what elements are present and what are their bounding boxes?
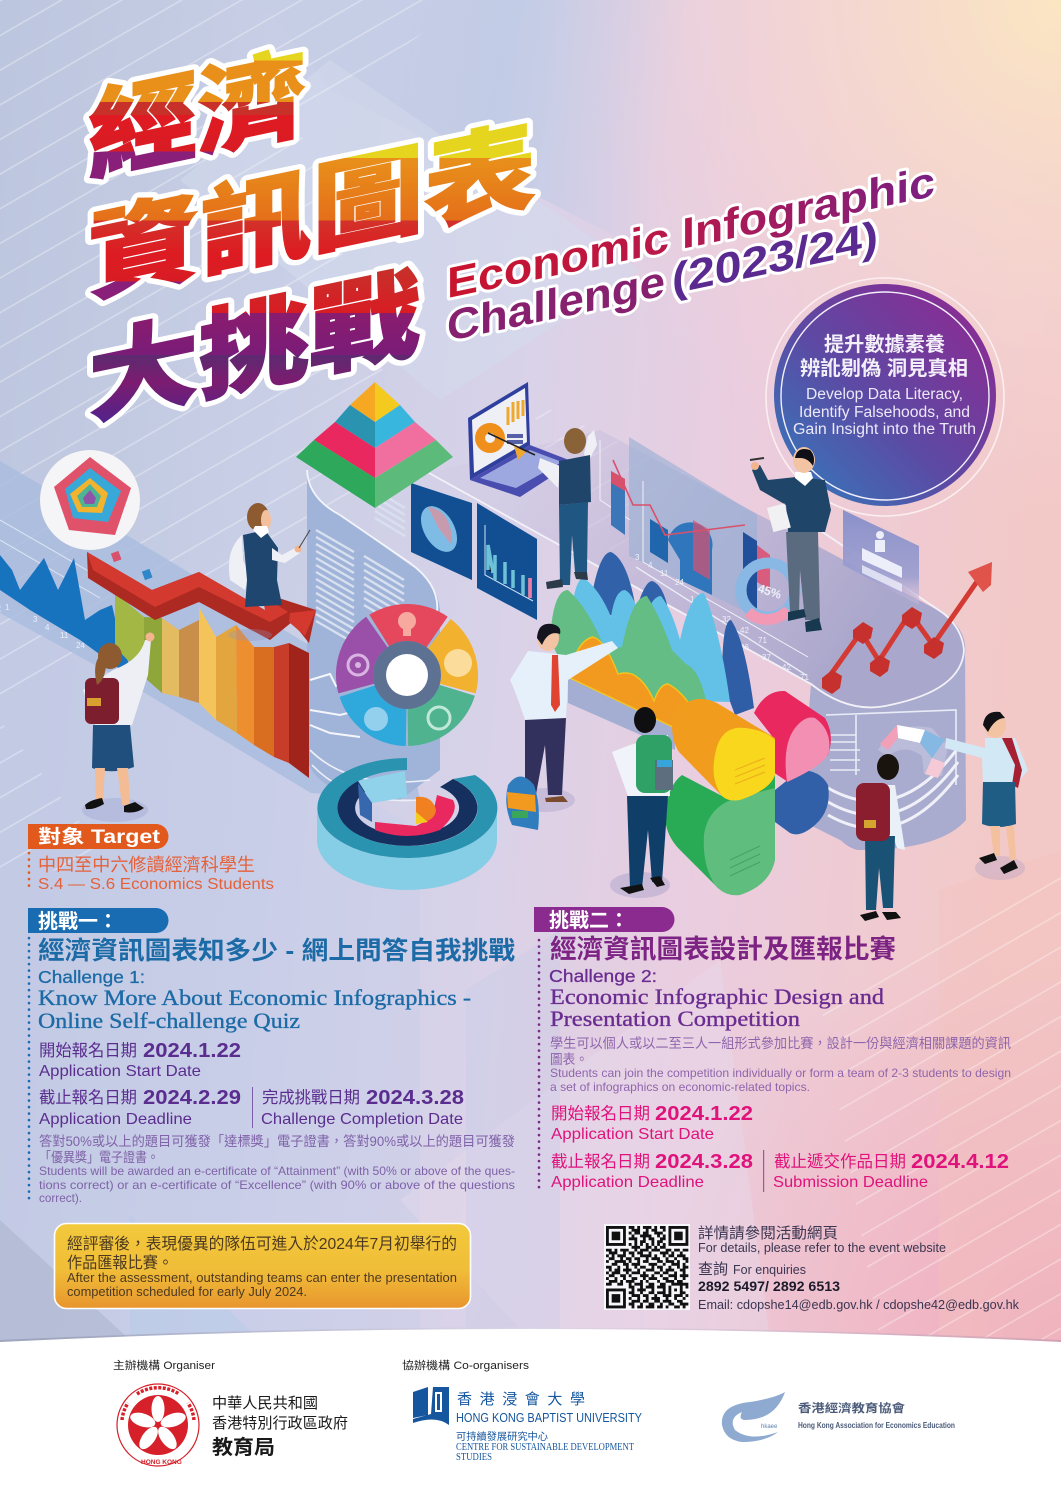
- dates: challenge 1: Challenge Completion Date: [261, 1111, 463, 1128]
- note: challenge 1: 「優異獎」電子證書。: [39, 1149, 159, 1165]
- laptop: [468, 382, 574, 497]
- title: Chinese: 資訊圖表: [88, 110, 536, 314]
- callout: presentation competition: 經評審後，表現優異的隊伍可進入於2024年7月初舉行的: [67, 1235, 457, 1253]
- section: challenge 1: Know More About Economic Infographics -: [38, 985, 471, 1010]
- segment gauge on drum: [878, 725, 948, 778]
- title: Chinese: 大挑戰: [88, 258, 420, 437]
- dates: challenge 1: 完成挑戰日期: [262, 1088, 360, 1107]
- section: target: 中四至中六修讀經濟科學生: [38, 855, 255, 875]
- pill: challenge 1: [28, 908, 168, 933]
- contact details: 詳情請參閱活動網頁: [698, 1225, 838, 1242]
- contact details: 查詢: [698, 1261, 728, 1278]
- note: challenge 1: correct).: [39, 1191, 82, 1205]
- note: challenge 2: [550, 1035, 1011, 1094]
- note: challenge 2: Students can join the competition individually or form a team of 2-3 students to design: [550, 1066, 1011, 1080]
- contact details: Email: cdopshe14@edb.gov.hk / cdopshe42@edb.gov.hk: [698, 1298, 1020, 1312]
- organiser name: Education Bureau: 中華人民共和國: [212, 1395, 318, 1412]
- dates: challenge 2: 2024.3.28: [655, 1151, 753, 1173]
- dates: challenge 1: 2024.3.28: [366, 1087, 464, 1109]
- dates: challenge 2: 開始報名日期: [551, 1104, 650, 1123]
- dates: challenge 1: 2024.1.22: [143, 1040, 241, 1062]
- HKAEE name: 香港經濟教育協會: [798, 1401, 906, 1415]
- slogan badge: [766, 278, 1004, 516]
- person: man with paper: [750, 447, 831, 632]
- note: challenge 2: a set of infographics on economic-related topics.: [550, 1080, 810, 1094]
- section: challenge 1: Online Self-challenge Quiz: [38, 1008, 300, 1033]
- chart overlay panel with bars and donut: 42: [782, 663, 791, 672]
- chart overlay panel with bars and donut: 11: [660, 569, 669, 578]
- red zigzag arrow: [822, 562, 992, 694]
- slogan badge: Identify Falsehoods, and: [799, 404, 970, 421]
- person: teacher: [228, 503, 310, 641]
- HKBU name: 可持續發展研究中心: [456, 1430, 548, 1443]
- chart overlay panel with bars and donut: 1: [690, 595, 695, 604]
- callout: presentation competition: 作品匯報比賽。: [67, 1253, 173, 1272]
- left platform band: [0, 461, 420, 800]
- note: challenge 2: 圖表。: [550, 1052, 588, 1067]
- area chart: blue peaks: [0, 555, 135, 680]
- note: challenge 2: 學生可以個人或以二至三人一組形式參加比賽，設計一份與經濟相關課題的資訊: [550, 1035, 1011, 1051]
- left platform band: 11: [60, 631, 69, 640]
- organiser name: Education Bureau: 香港特別行政區政府: [212, 1415, 348, 1432]
- logo: HKSAR emblem: [117, 1384, 199, 1466]
- layered mountain chart: [550, 552, 754, 750]
- title: English: Challenge: [447, 258, 665, 351]
- slogan badge: Gain Insight into the Truth: [793, 421, 976, 438]
- person: man at laptop: [538, 428, 597, 589]
- organiser name: Education Bureau: 教育局: [212, 1435, 275, 1459]
- data drum: blue: [775, 770, 829, 834]
- logo: HKAEE: hkaee: [761, 1424, 778, 1430]
- chart overlay panel with bars and donut: 24: [675, 578, 684, 587]
- chart overlay panel with bars and donut: 2: [705, 605, 710, 614]
- contact details: [698, 1225, 1020, 1312]
- radar chart badge: [40, 450, 140, 550]
- section: target: [28, 824, 274, 893]
- callout: presentation competition: After the assessment, outstanding teams can enter the presentation: [67, 1271, 457, 1285]
- chart overlay panel with bars and donut: 32: [722, 615, 731, 624]
- chart panel: bars: [477, 503, 537, 620]
- HKBU name: STUDIES: [456, 1452, 492, 1463]
- pyramid: [296, 382, 453, 508]
- dates: challenge 1: Application Deadline: [39, 1111, 192, 1128]
- note: challenge 1: Students will be awarded an e-certificate of “Attainment” (with 50% or above of the ques-: [39, 1164, 515, 1178]
- callout: presentation competition: [54, 1224, 470, 1308]
- pill: challenge 2: 挑戰二：: [549, 909, 629, 932]
- dates: challenge 2: 截止報名日期: [551, 1152, 650, 1171]
- logo: HKBU book: [413, 1387, 449, 1425]
- callout: presentation competition: competition scheduled for early July 2024.: [67, 1285, 307, 1299]
- HKBU name: 香港浸會大學: [457, 1390, 589, 1408]
- chart overlay panel with bars and donut: [600, 437, 809, 682]
- dates: challenge 2: 截止遞交作品日期: [774, 1152, 906, 1171]
- title: Chinese: 經濟: [88, 38, 306, 193]
- HKBU name: [456, 1390, 642, 1463]
- slogan badge: Develop Data Literacy,: [806, 386, 963, 403]
- section: challenge 2: [534, 907, 1011, 1192]
- QR code: [604, 1224, 690, 1310]
- chart overlay panel with bars and donut: 71: [800, 673, 809, 682]
- title: English: (2023/24): [672, 213, 878, 304]
- dates: challenge 2: 2024.1.22: [655, 1103, 753, 1125]
- dates: challenge 1: 開始報名日期: [39, 1041, 137, 1060]
- heading: challenge 2: 經濟資訊圖表設計及匯報比賽: [550, 934, 896, 964]
- left platform band: 1: [5, 603, 10, 612]
- pill: challenge 2: [534, 907, 674, 932]
- co-organisers label: 協辦機構 Co-organisers: [402, 1358, 530, 1372]
- section: challenge 1: Challenge 1:: [38, 967, 145, 987]
- chart overlay panel with bars and donut: 71: [758, 636, 767, 645]
- note: challenge 1: tions correct) or an e-certificate of “Excellence” (with 90% or above of the questions: [39, 1178, 515, 1192]
- section: challenge 2: Challenge 2:: [549, 966, 657, 986]
- logo: HKSAR emblem: HONG KONG: [141, 1459, 182, 1466]
- dates: challenge 2: 2024.4.12: [911, 1151, 1009, 1173]
- chart overlay panel with bars and donut: 26: [740, 643, 749, 652]
- pill: challenge 1: 挑戰一：: [38, 910, 118, 933]
- heading: challenge 1: 經濟資訊圖表知多少 - 網上問答自我挑戰: [38, 937, 515, 965]
- section: challenge 2: Presentation Competition: [550, 1006, 800, 1031]
- note: challenge 1: [39, 1133, 515, 1205]
- HKAEE name: [798, 1401, 955, 1430]
- dates: challenge 2: [551, 1103, 1009, 1192]
- section: challenge 2: Economic Infographic Design and: [550, 984, 884, 1009]
- person: man with tie: [506, 624, 618, 830]
- slogan badge: 辨訛剔偽 洞見真相: [800, 356, 968, 380]
- title: Chinese: 資訊圖表: [88, 110, 536, 314]
- chart overlay panel with bars and donut: 3: [635, 553, 640, 562]
- central column platform: [307, 470, 440, 801]
- chart panel: pie: [411, 483, 472, 580]
- dates: challenge 1: 2024.2.29: [143, 1087, 241, 1109]
- info board: [843, 510, 919, 605]
- logo: HKAEE: [722, 1392, 785, 1442]
- section: challenge 1: [28, 908, 515, 1205]
- organiser name: Education Bureau: [212, 1395, 348, 1459]
- chart overlay panel with bars and donut: 37: [762, 653, 771, 662]
- title: Chinese: [88, 0, 536, 437]
- dates: challenge 2: Application Start Date: [551, 1126, 714, 1143]
- contact details: For enquiries: [733, 1263, 806, 1277]
- left platform band: 4: [45, 623, 50, 632]
- contact details: 2892 5497/ 2892 6513: [698, 1279, 841, 1294]
- person: student girl at drum: [945, 712, 1028, 880]
- dates: challenge 2: Submission Deadline: [773, 1174, 928, 1191]
- contact details: For details, please refer to the event website: [698, 1241, 946, 1255]
- slogan badge: 提升數據素養: [824, 333, 945, 356]
- chart overlay panel with bars and donut: 4: [648, 561, 653, 570]
- dates: challenge 1: [39, 1040, 464, 1128]
- person: student with maroon backpack: [856, 754, 905, 921]
- title: English: Challenge: [447, 258, 665, 351]
- data drum: pink: [754, 691, 831, 782]
- HKBU name: CENTRE FOR SUSTAINABLE DEVELOPMENT: [456, 1442, 634, 1453]
- section: target: 對象 Target: [38, 826, 161, 848]
- organiser label: 主辦機構 Organiser: [113, 1358, 215, 1372]
- title: Chinese: 經濟: [88, 38, 306, 193]
- HKAEE name: Hong Kong Association for Economics Education: [798, 1420, 955, 1430]
- person: student with green backpack: [610, 707, 673, 898]
- title: English: (2023/24): [672, 213, 878, 304]
- chart overlay panel with bars and donut: 45%: [756, 581, 783, 602]
- dates: challenge 1: Application Start Date: [39, 1063, 201, 1080]
- footer: [0, 1328, 1061, 1500]
- HKBU name: HONG KONG BAPTIST UNIVERSITY: [456, 1410, 642, 1425]
- 3D donut: [317, 758, 497, 890]
- icon wheel: [336, 604, 478, 746]
- left platform band: 24: [76, 641, 85, 650]
- person: student girl pointing: [82, 632, 154, 822]
- title: English: Economic Infographic: [447, 158, 935, 308]
- large platform top and drum base: [429, 430, 966, 850]
- bar chart with red arrow: [87, 552, 316, 778]
- left platform band: 3: [33, 615, 38, 624]
- chart overlay panel with bars and donut: 42: [740, 626, 749, 635]
- section: target: S.4 — S.6 Economics Students: [38, 876, 274, 893]
- title: Chinese: 大挑戰: [88, 258, 420, 437]
- title: English: Economic Infographic: [447, 158, 935, 308]
- dates: challenge 1: 截止報名日期: [39, 1088, 137, 1107]
- data drum: orange: [672, 699, 775, 800]
- note: challenge 1: 答對50%或以上的題目可獲發「達標獎」電子證書，答對90%或以上的題目可獲發: [39, 1133, 515, 1149]
- title: English: [447, 158, 935, 351]
- data drum: green: [665, 775, 775, 895]
- dates: challenge 2: Application Deadline: [551, 1174, 704, 1191]
